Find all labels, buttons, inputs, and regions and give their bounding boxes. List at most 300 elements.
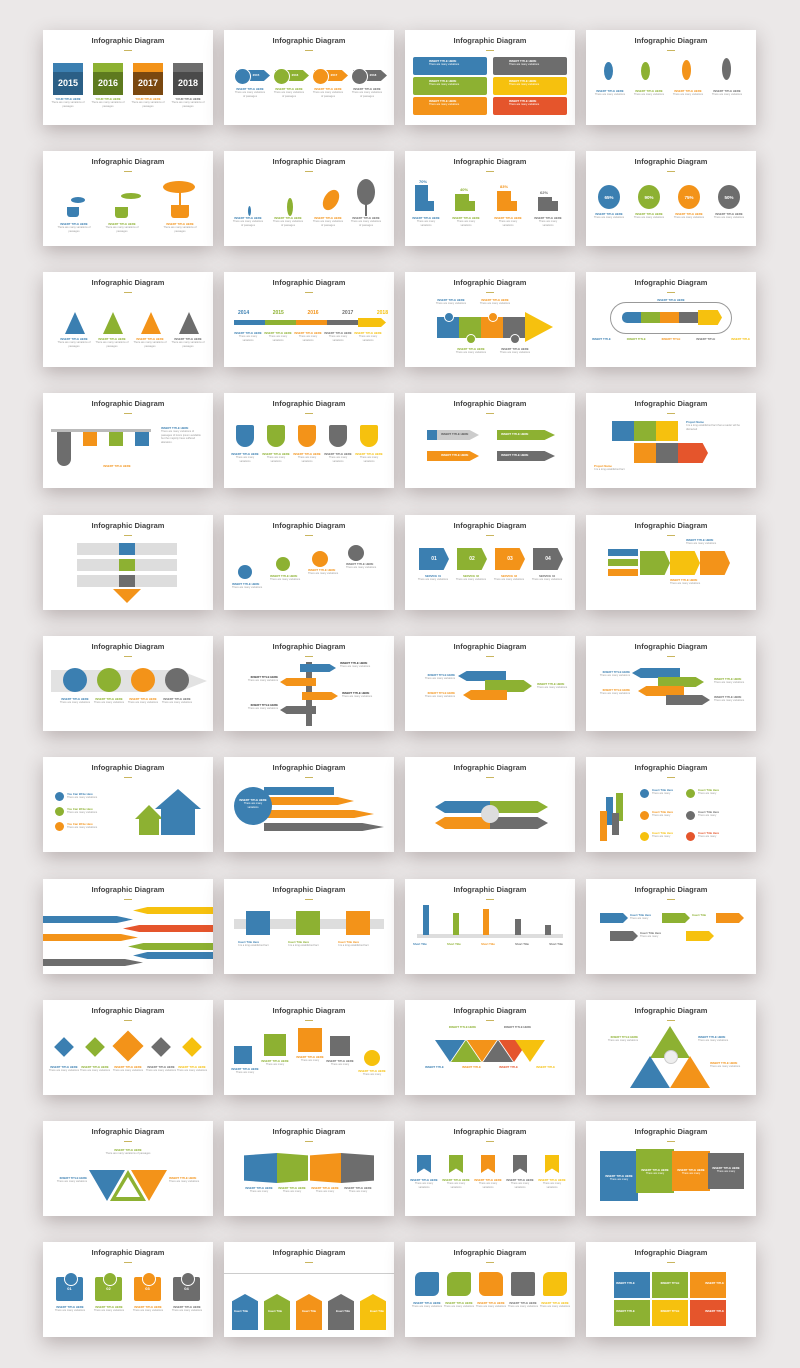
triangles: INSERT TITLE HERE (504, 1025, 531, 1029)
tags: 2017 (331, 73, 337, 77)
slide 40: overlapping squares (586, 1121, 756, 1216)
diamonds: INSERT TITLE HERE (50, 1065, 78, 1069)
bookmarks (410, 1155, 566, 1189)
triangle: There are many variations (710, 1065, 740, 1068)
slide 14: shields (224, 393, 394, 488)
timeline: INSERT TITLE HERE (234, 331, 262, 335)
puzzle: Project Name (686, 420, 704, 424)
flags: INSERT TITLE HERE (413, 1301, 441, 1305)
pins: INSERT TITLE HERE (95, 1305, 123, 1309)
grid (614, 1272, 726, 1326)
slide 19: numbered arrows: Infographic Diagram (454, 521, 526, 530)
flasks: There are many variations of passages (133, 341, 166, 348)
grid: INSERT TITLE (705, 1309, 724, 1313)
numbered: There are many variations (494, 578, 524, 581)
puzzle: It is a long established fact that a reader will be distracted (686, 424, 740, 431)
timeline: 2017 (342, 310, 353, 316)
calendars: 2018 (178, 78, 198, 88)
squares: There are many (610, 1178, 628, 1181)
chevrons (608, 538, 730, 585)
flasks: INSERT TITLE HERE (60, 337, 88, 341)
slide 30: belt squares: Infographic Diagram (273, 885, 345, 894)
slide 21: big arrow circles: Infographic Diagram (92, 642, 164, 651)
circle bars: INSERT TITLE HERE (239, 798, 267, 802)
timeline: INSERT TITLE HERE (264, 331, 292, 335)
blocks: There are many variations (500, 351, 530, 354)
timeline: INSERT TITLE HERE (324, 331, 352, 335)
flags: INSERT TITLE HERE (541, 1301, 569, 1305)
blocks (436, 298, 553, 354)
tags: INSERT TITLE HERE (501, 453, 528, 457)
shapes: There are many (283, 1190, 301, 1193)
loop: INSERT TITLE (592, 337, 611, 341)
blocks: There are many variations (436, 302, 466, 305)
flasks: INSERT TITLE HERE (174, 337, 202, 341)
slide 31: pins: Infographic Diagram (454, 885, 526, 894)
banners: INSERT TITLE HERE (161, 426, 188, 430)
diamonds: INSERT TITLE HERE (81, 1065, 109, 1069)
shapes: There are many (349, 1190, 367, 1193)
tags: Insert Title Here (640, 931, 661, 935)
puzzle: It is a long established fact (594, 468, 625, 471)
slide 5: pots (43, 151, 213, 246)
diamonds (49, 1030, 207, 1072)
arrows: INSERT TITLE HERE (603, 670, 630, 674)
triangles (57, 1148, 199, 1201)
flasks: There are many variations of passages (95, 341, 128, 348)
slide 21: big arrow circles (43, 636, 213, 731)
arrows icons: Insert Title Here (698, 788, 719, 792)
signpost: There are many variations (340, 665, 370, 668)
shapes: INSERT TITLE HERE (311, 1186, 339, 1190)
circle bars: There are many variations (244, 802, 262, 809)
slide 1: calendars (43, 30, 213, 125)
shields: There are many variations (298, 456, 316, 463)
shields: INSERT TITLE HERE (262, 452, 290, 456)
stacked (77, 543, 177, 603)
squares: INSERT TITLE HERE (605, 1174, 633, 1178)
pins: 04 (184, 1286, 189, 1291)
pins: Short Title (549, 942, 563, 946)
trucks: There are many variations (539, 220, 557, 227)
shields: INSERT TITLE HERE (324, 452, 352, 456)
flags: There are many variations (444, 1305, 474, 1308)
plant pots: There are many variations of passages (105, 226, 138, 233)
triangle: There are many variations (698, 1039, 728, 1042)
trucks: 83% (500, 184, 508, 189)
arrows: There are many variations (425, 695, 455, 698)
slide 26: circle and bars: Infographic Diagram (273, 763, 345, 772)
blocks: INSERT TITLE HERE (501, 347, 529, 351)
timeline: There are many variations (359, 335, 377, 342)
slide 19: numbered arrows (405, 515, 575, 610)
bags: There are many variations (674, 216, 704, 219)
slide 39: bookmarks: Infographic Diagram (454, 1127, 526, 1136)
triangles: There are many variations of passages (106, 1152, 150, 1155)
cross arrows (435, 801, 548, 829)
arrow with circles: INSERT TITLE HERE (163, 697, 191, 701)
bars: There are many variations (509, 103, 539, 106)
trucks: INSERT TITLE HERE (494, 216, 522, 220)
tags (235, 69, 387, 98)
arrow with circles: There are many variations (60, 701, 90, 704)
grid: INSERT TITLE (616, 1281, 635, 1285)
squares: INSERT TITLE HERE (296, 1055, 324, 1059)
tags: INSERT TITLE HERE (314, 87, 342, 91)
slide 37: inverted triangles (43, 1121, 213, 1216)
calendars: There are many variations of passages (91, 101, 124, 108)
sprouts: There are many variations of passages (351, 220, 381, 227)
triangle (608, 1026, 740, 1088)
squares: There are many (717, 1170, 735, 1173)
arrows icons: Insert Title Here (698, 831, 719, 835)
signpost: INSERT TITLE HERE (342, 691, 369, 695)
pins: INSERT TITLE HERE (134, 1305, 162, 1309)
bags: INSERT TITLE HERE (595, 212, 623, 216)
bars: INSERT TITLE HERE (509, 59, 536, 63)
bookmarks: There are many variations (415, 1182, 433, 1189)
slide 32: arrow tags (586, 879, 756, 974)
puzzle: Project Name (594, 464, 612, 468)
squares: INSERT TITLE HERE (261, 1059, 289, 1063)
bars: INSERT TITLE HERE (509, 79, 536, 83)
arrows icons: Insert Title Here (652, 788, 673, 792)
diamonds: There are many variations (146, 1069, 176, 1072)
signpost: There are many variations (342, 695, 372, 698)
signpost (248, 661, 372, 726)
tags: There are many variations of passages (235, 91, 265, 98)
slide 31: pins (405, 879, 575, 974)
squares: There are many (266, 1063, 284, 1066)
slide 9: flasks (43, 272, 213, 367)
squares: INSERT TITLE HERE (677, 1168, 705, 1172)
squares: INSERT TITLE HERE (712, 1166, 740, 1170)
list: You Can Write Here (67, 792, 93, 796)
tags: Insert Title (268, 1309, 282, 1313)
slide 10: timeline: Infographic Diagram (273, 278, 345, 287)
signpost: There are many variations (248, 707, 278, 710)
pins (413, 905, 563, 946)
numbered: There are many variations (532, 578, 562, 581)
pins: 03 (145, 1286, 150, 1291)
squares: INSERT TITLE HERE (231, 1067, 259, 1071)
slide 24: crossing arrows 4 (586, 636, 756, 731)
timeline (234, 310, 388, 342)
arrows: INSERT TITLE HERE (603, 688, 630, 692)
figure icons: There are many variations (634, 93, 664, 96)
arrows icons: There are many (698, 792, 716, 795)
arrows icons: Insert Title Here (652, 810, 673, 814)
bookmarks: INSERT TITLE HERE (474, 1178, 502, 1182)
triangles: INSERT TITLE (462, 1065, 481, 1069)
shields (231, 425, 383, 463)
icons: There are many variations (308, 572, 338, 575)
belt: Insert Title Here (288, 940, 309, 944)
triangles: INSERT TITLE HERE (449, 1025, 476, 1029)
plant pots: There are many variations of passages (163, 226, 196, 233)
slide 10: timeline (224, 272, 394, 367)
slide 27: center cross arrows: Infographic Diagram (454, 763, 526, 772)
squares: INSERT TITLE HERE (326, 1059, 354, 1063)
figure icons (595, 58, 742, 96)
loop: INSERT TITLE (627, 337, 646, 341)
tags: Insert Title (370, 1309, 384, 1313)
slide 29: many arrows (43, 879, 213, 974)
slide 42: hanging tags: Infographic Diagram (273, 1248, 345, 1257)
flags: INSERT TITLE HERE (477, 1301, 505, 1305)
figure icons: There are many variations (712, 93, 742, 96)
shapes (244, 1153, 374, 1193)
slide 13: hanging banners: Infographic Diagram (92, 399, 164, 408)
diamonds: INSERT TITLE HERE (114, 1065, 142, 1069)
shields: INSERT TITLE HERE (355, 452, 383, 456)
squares: There are many (236, 1071, 254, 1074)
arrow with circles (51, 668, 206, 704)
triangle: INSERT TITLE HERE (710, 1061, 737, 1065)
arrows (43, 907, 213, 966)
slide 16: puzzle (586, 393, 756, 488)
slide 11: arrow blocks: Infographic Diagram (454, 278, 526, 287)
bars: INSERT TITLE HERE (429, 79, 456, 83)
icons: There are many variations (232, 586, 262, 589)
shields: There are many variations (267, 456, 285, 463)
list: You Can Write Here (67, 822, 93, 826)
chevrons: INSERT TITLE HERE (670, 578, 697, 582)
arrows (425, 671, 567, 700)
slide 18: pedestals (224, 515, 394, 610)
shapes: INSERT TITLE HERE (278, 1186, 306, 1190)
slide 43: flags (405, 1242, 575, 1337)
shapes: INSERT TITLE HERE (344, 1186, 372, 1190)
bags: 65% (604, 195, 614, 200)
arrows icons: There are many (698, 814, 716, 817)
numbered: 01 (431, 556, 437, 562)
slide 11: arrow blocks (405, 272, 575, 367)
calendars: 2017 (138, 78, 158, 88)
icons: INSERT TITLE HERE (308, 568, 335, 572)
slide 41: numbered pins (43, 1242, 213, 1337)
bags: 90% (644, 195, 654, 200)
timeline: 2016 (307, 310, 319, 316)
slide 16: puzzle: Infographic Diagram (635, 399, 707, 408)
pins: There are many variations (94, 1309, 124, 1312)
slide 33: diamonds: Infographic Diagram (92, 1006, 164, 1015)
slide 28: up down arrows and icons (586, 757, 756, 852)
pins: 02 (106, 1286, 111, 1291)
timeline: INSERT TITLE HERE (354, 331, 382, 335)
calendars: YOUR TITLE HERE (55, 97, 81, 101)
pins: Short Title (413, 942, 427, 946)
calendars: There are many variations of passages (51, 101, 84, 108)
bars: There are many variations (429, 63, 459, 66)
flags: There are many variations (540, 1305, 570, 1308)
loop: INSERT TITLE (662, 337, 680, 341)
bookmarks: INSERT TITLE HERE (506, 1178, 534, 1182)
arrow with circles: INSERT TITLE HERE (95, 697, 123, 701)
bars: There are many variations (509, 63, 539, 66)
belt: It is a long established fact (288, 944, 319, 947)
arrows icons: There are many (652, 792, 670, 795)
bookmarks: There are many variations (543, 1182, 561, 1189)
bags: INSERT TITLE HERE (715, 212, 743, 216)
bars: INSERT TITLE HERE (509, 99, 536, 103)
icons (232, 545, 376, 589)
bags: INSERT TITLE HERE (675, 212, 703, 216)
squares: There are many (363, 1073, 381, 1076)
slide 17: down chevrons (43, 515, 213, 610)
slide 8: money bags: Infographic Diagram (635, 157, 707, 166)
diamonds: There are many variations (177, 1069, 207, 1072)
shapes: There are many (316, 1190, 334, 1193)
slide 2: year tags: Infographic Diagram (273, 36, 345, 45)
slide 8: money bags (586, 151, 756, 246)
icons: There are many variations (346, 566, 376, 569)
bars: There are many variations (429, 83, 459, 86)
tags: Insert Title Here (630, 913, 651, 917)
slide 20: chevrons with circles (586, 515, 756, 610)
sprouts: INSERT TITLE HERE (274, 216, 302, 220)
slide 13: hanging banners (43, 393, 213, 488)
arrows icons (600, 788, 719, 841)
pins: There are many variations (172, 1309, 202, 1312)
sprouts: INSERT TITLE HERE (234, 216, 262, 220)
slide 36: triangle of triangles (586, 1000, 756, 1095)
tags: There are many (630, 917, 648, 920)
shields: INSERT TITLE HERE (293, 452, 321, 456)
slide 20: chevrons with circles: Infographic Diagram (635, 521, 707, 530)
numbered: SERVICE 04 (539, 574, 555, 578)
squares (600, 1149, 744, 1201)
pins: Short Title (447, 942, 461, 946)
figure icons: There are many variations (595, 93, 625, 96)
signpost: There are many variations (248, 679, 278, 682)
slide 14: shields: Infographic Diagram (273, 399, 345, 408)
tags: There are many variations of passages (274, 91, 304, 98)
figure icons: INSERT TITLE HERE (635, 89, 663, 93)
squares: There are many (301, 1059, 319, 1062)
tags: INSERT TITLE HERE (236, 87, 264, 91)
slide 6: sprouts: Infographic Diagram (273, 157, 345, 166)
tags (224, 1273, 394, 1330)
slide 25: list and houses: Infographic Diagram (92, 763, 164, 772)
triangle: INSERT TITLE HERE (698, 1035, 725, 1039)
grid: INSERT TITLE (616, 1309, 635, 1313)
slide 23: crossing arrows 3: Infographic Diagram (454, 642, 526, 651)
tags: Insert Title (692, 913, 706, 917)
icons: INSERT TITLE HERE (270, 574, 297, 578)
numbered: 04 (545, 556, 551, 562)
bookmarks: There are many variations (447, 1182, 465, 1189)
trucks: 40% (460, 187, 468, 192)
belt: It is a long established fact (338, 944, 369, 947)
diamonds: There are many variations (49, 1069, 79, 1072)
belt: Insert Title Here (338, 940, 359, 944)
list: There are many variations (67, 811, 97, 814)
timeline: 2015 (273, 310, 284, 316)
triangles: INSERT TITLE HERE (60, 1176, 87, 1180)
triangle: There are many variations (608, 1039, 638, 1042)
tags: There are many variations of passages (313, 91, 343, 98)
arrows: INSERT TITLE HERE (714, 677, 741, 681)
slide 36: triangle of triangles: Infographic Diagram (635, 1006, 707, 1015)
diamonds: There are many variations (80, 1069, 110, 1072)
slide 4: figures (586, 30, 756, 125)
blocks: INSERT TITLE HERE (437, 298, 465, 302)
slide 9: flasks: Infographic Diagram (92, 278, 164, 287)
slide 44: grid boxes: Infographic Diagram (635, 1248, 707, 1257)
numbered: There are many variations (456, 578, 486, 581)
slide 33: diamonds (43, 1000, 213, 1095)
slide 32: arrow tags: Infographic Diagram (635, 885, 707, 894)
numbered: There are many variations (418, 578, 448, 581)
chevrons: There are many variations (686, 542, 716, 545)
flags (412, 1272, 570, 1308)
icons: INSERT TITLE HERE (346, 562, 373, 566)
diamonds: There are many variations (113, 1069, 143, 1072)
plant pots: INSERT TITLE HERE (60, 222, 88, 226)
blocks: INSERT TITLE HERE (481, 298, 509, 302)
slide 26: circle and bars (224, 757, 394, 852)
blocks: There are many variations (480, 302, 510, 305)
slide 15: tag arrows (405, 393, 575, 488)
slide 22: signpost: Infographic Diagram (273, 642, 345, 651)
numbered: SERVICE 03 (501, 574, 517, 578)
list: You Can Write Here (67, 807, 93, 811)
tags (600, 913, 744, 941)
shields: There are many variations (329, 456, 347, 463)
calendars: There are many variations of passages (131, 101, 164, 108)
list: There are many variations (67, 796, 97, 799)
bags: There are many variations (634, 216, 664, 219)
numbered: SERVICE 02 (463, 574, 479, 578)
bookmarks: There are many variations (479, 1182, 497, 1189)
arrows: There are many variations (714, 681, 744, 684)
trucks: INSERT TITLE HERE (452, 216, 480, 220)
flasks: INSERT TITLE HERE (98, 337, 126, 341)
calendars: 2015 (58, 78, 78, 88)
diamonds: INSERT TITLE HERE (147, 1065, 175, 1069)
triangles: INSERT TITLE HERE (169, 1176, 196, 1180)
slide 5: pots: Infographic Diagram (92, 157, 164, 166)
arrows (600, 668, 744, 705)
tags: There are many (640, 935, 658, 938)
numbered: SERVICE 01 (425, 574, 441, 578)
slide 23: crossing arrows 3 (405, 636, 575, 731)
flags: There are many variations (508, 1305, 538, 1308)
slide 41: numbered pins: Infographic Diagram (92, 1248, 164, 1257)
shapes: INSERT TITLE HERE (245, 1186, 273, 1190)
numbered (418, 548, 563, 581)
flags: There are many variations (412, 1305, 442, 1308)
slide 39: bookmarks (405, 1121, 575, 1216)
plant pots: There are many variations of passages (57, 226, 90, 233)
arrows: There are many variations (600, 674, 630, 677)
grid: INSERT TITLE (705, 1281, 724, 1285)
arrows: INSERT TITLE HERE (714, 695, 741, 699)
triangles (425, 1025, 555, 1069)
slide 38: hexagon shapes: Infographic Diagram (273, 1127, 345, 1136)
slide 12: cycle (586, 272, 756, 367)
bags: 50% (724, 195, 734, 200)
slide 34: stair squares: Infographic Diagram (273, 1006, 345, 1015)
tags: INSERT TITLE HERE (275, 87, 303, 91)
flasks (57, 312, 204, 348)
slide 40: overlapping squares: Infographic Diagram (635, 1127, 707, 1136)
bars (413, 57, 567, 115)
arrows: INSERT TITLE HERE (428, 673, 455, 677)
triangles: There are many variations (57, 1180, 87, 1183)
calendars: YOUR TITLE HERE (135, 97, 161, 101)
